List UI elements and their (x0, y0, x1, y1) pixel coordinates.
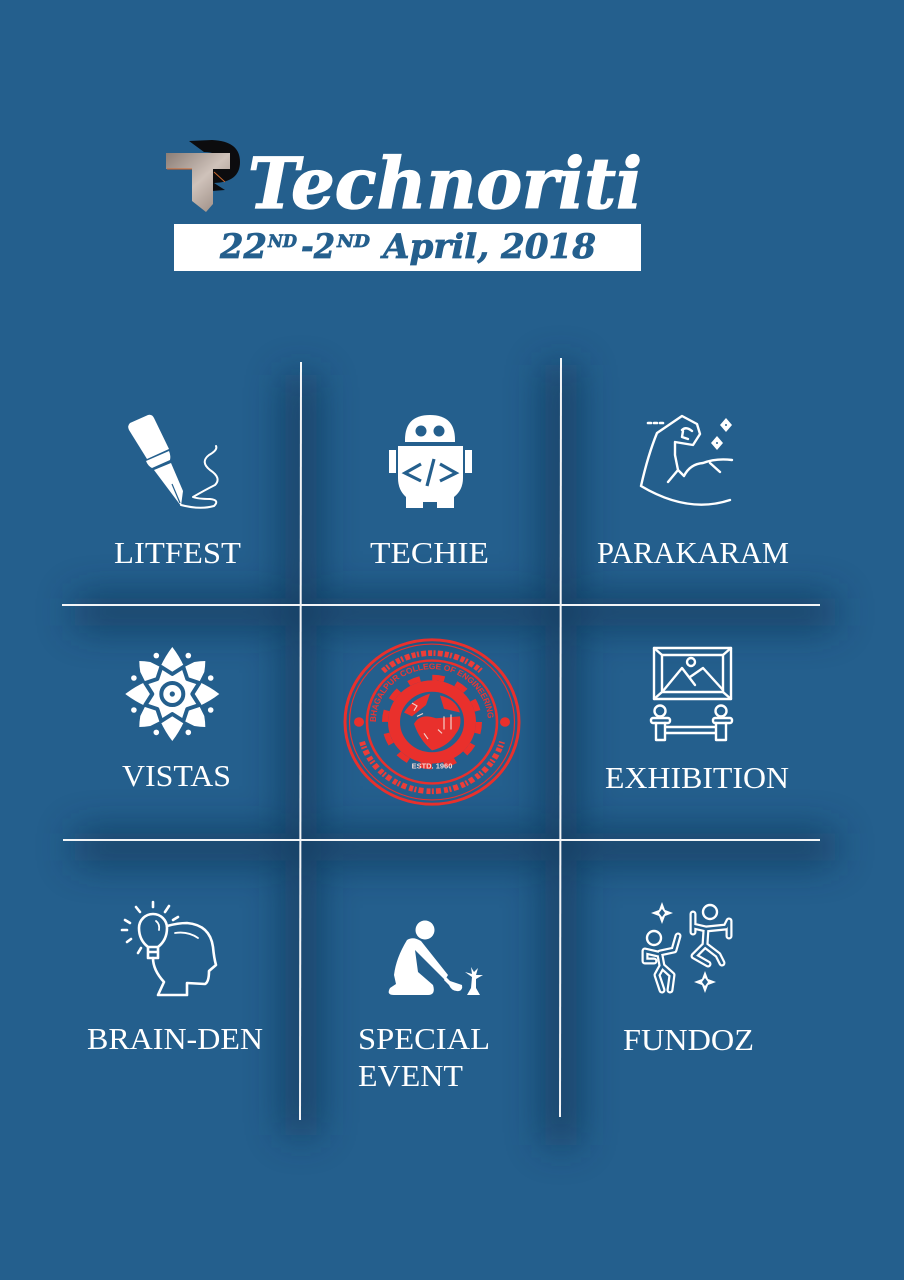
label: PARAKARAM: PARAKARAM (597, 535, 789, 570)
panel: techie (370, 415, 489, 570)
label: EXHIBITION: EXHIBITION (605, 760, 789, 795)
panel: litfest (114, 415, 241, 570)
established year: ESTD. 1960 (412, 762, 452, 770)
icon: framed picture and stanchions (651, 648, 732, 740)
label: SPECIAL: SPECIAL (358, 1021, 490, 1056)
gear (385, 678, 479, 766)
panel: exhibition (605, 648, 789, 795)
title: Technoriti: Technoriti (248, 142, 642, 225)
date banner (174, 224, 641, 271)
logo letter R (189, 140, 240, 191)
date text: -2 (301, 227, 335, 267)
label: FUNDOZ: FUNDOZ (623, 1022, 754, 1057)
label: TECHIE: TECHIE (370, 535, 489, 570)
logo letter T (166, 153, 230, 212)
date text (219, 227, 596, 267)
motto arcs (362, 653, 502, 791)
label: VISTAS: VISTAS (122, 758, 231, 793)
center art (401, 693, 463, 751)
panel: brain-den (87, 902, 263, 1056)
date text: 22 (219, 227, 267, 267)
icon: head with light bulb (122, 902, 216, 995)
icon: dancers (645, 902, 729, 993)
title logo (166, 140, 240, 212)
panel: special event (358, 920, 490, 1093)
icon: flexed arm (641, 416, 732, 505)
college name: BHAGALPUR COLLEGE OF ENGINEERING (370, 664, 494, 722)
date text: April, 2018 (380, 227, 596, 267)
grid lines (62, 358, 820, 1120)
label: LITFEST: LITFEST (114, 535, 241, 570)
emblem: college seal (344, 638, 520, 806)
panel: vistas (122, 647, 231, 793)
icon: mandala (125, 647, 219, 741)
icon: robot (389, 415, 472, 508)
panel: parakaram (597, 416, 789, 570)
label: BRAIN-DEN: BRAIN-DEN (87, 1021, 263, 1056)
panel: fundoz (623, 902, 754, 1057)
icon: person planting a sapling (389, 920, 483, 995)
icon: fountain pen (128, 415, 218, 508)
label: EVENT: EVENT (358, 1058, 463, 1093)
date text: ND (267, 232, 297, 252)
date text: ND (336, 232, 370, 252)
